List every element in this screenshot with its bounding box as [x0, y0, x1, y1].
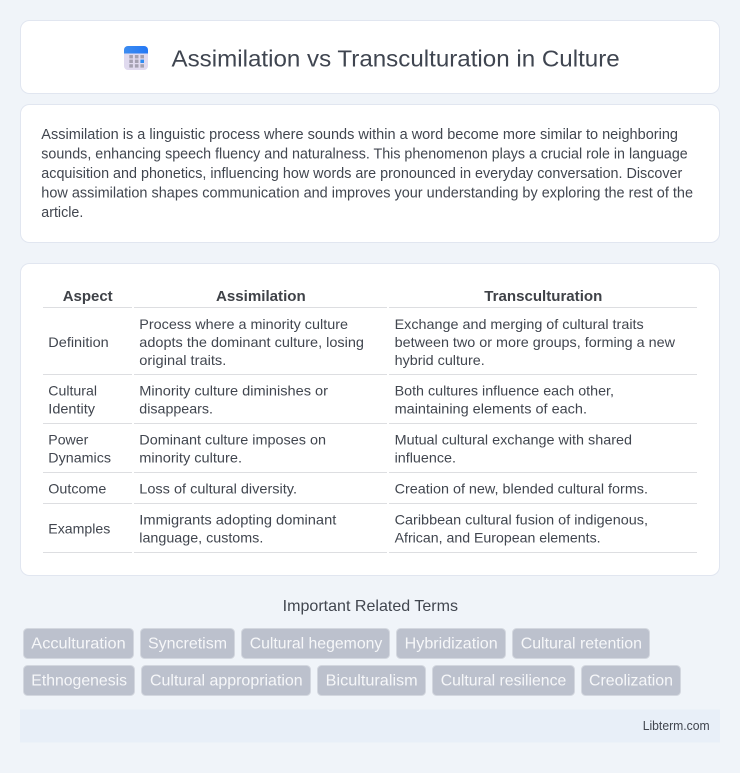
chip: creolization: Creolization — [589, 673, 673, 690]
row: definition: adopts the dominant culture, losing — [139, 334, 364, 350]
table header row: Assimilation — [216, 288, 306, 305]
heading: important related terms: Important Related Terms — [283, 598, 458, 615]
chip: cultural resilience — [432, 666, 574, 696]
row: examples — [43, 512, 697, 553]
row: cultural identity: Cultural — [48, 382, 97, 398]
row: cultural identity: Identity — [48, 400, 95, 416]
table header row: Aspect — [63, 288, 113, 305]
row: cultural identity: Both cultures influence each other, — [395, 382, 614, 398]
row: cultural identity: maintaining elements of each. — [395, 400, 587, 416]
row: definition: Exchange and merging of cultural traits — [395, 316, 644, 332]
intro paragraph: acquisition and phonetics, influencing how words are pronounced in everyday conversation. Discover — [41, 166, 682, 182]
row: definition: original traits. — [139, 352, 226, 368]
intro paragraph: article. — [41, 205, 83, 221]
chip: cultural resilience: Cultural resilience — [441, 673, 566, 690]
chip: hybridization: Hybridization — [405, 636, 498, 653]
row: cultural identity — [43, 382, 697, 424]
row: power dynamics: minority culture. — [139, 450, 242, 466]
footer credit: Libterm.com — [643, 719, 710, 733]
chip: syncretism — [140, 628, 234, 658]
row: power dynamics: Dynamics — [48, 450, 111, 466]
chip: cultural retention: Cultural retention — [521, 636, 642, 653]
row: definition — [43, 316, 697, 375]
row: definition: between two or more groups, forming a new — [395, 334, 676, 350]
row: power dynamics: Dominant culture imposes on — [139, 432, 326, 448]
row: outcome: Creation of new, blended cultural forms. — [395, 480, 648, 496]
panel: comparison table — [20, 264, 720, 576]
row: examples: Immigrants adopting dominant — [139, 512, 336, 528]
header panel — [20, 20, 720, 94]
intro paragraph: Assimilation is a linguistic process where sounds within a word become more similar to neighboring — [41, 127, 678, 143]
table header row: Transculturation — [484, 288, 602, 305]
panel: introduction — [20, 104, 720, 242]
chip: creolization — [582, 666, 680, 696]
chip: syncretism: Syncretism — [148, 636, 227, 653]
row: examples: Caribbean cultural fusion of indigenous, — [395, 512, 648, 528]
chip: cultural hegemony: Cultural hegemony — [250, 636, 382, 653]
chip: ethnogenesis — [24, 666, 134, 696]
chip: cultural appropriation: Cultural appropriation — [150, 673, 303, 690]
row: definition: Definition — [48, 334, 109, 350]
chip: biculturalism: Biculturalism — [326, 673, 418, 690]
footer bar — [20, 710, 720, 742]
chip: acculturation: Acculturation — [31, 636, 126, 653]
intro paragraph: how assimilation shapes communication and improves your understanding by exploring the rest of the — [41, 185, 693, 201]
icon: calendar — [124, 46, 148, 70]
chip: hybridization — [396, 628, 506, 658]
row: examples: African, and European elements. — [395, 530, 601, 546]
chip: cultural appropriation — [142, 666, 310, 696]
row: definition: hybrid culture. — [395, 352, 485, 368]
row: power dynamics: Power — [48, 432, 89, 448]
row: examples: Examples — [48, 520, 110, 536]
row: outcome — [43, 480, 697, 504]
row: cultural identity: disappears. — [139, 400, 213, 416]
row: outcome: Loss of cultural diversity. — [139, 480, 297, 496]
chip: cultural retention — [512, 628, 650, 658]
row: definition: Process where a minority culture — [139, 316, 348, 332]
row: cultural identity: Minority culture diminishes or — [139, 382, 328, 398]
row: outcome: Outcome — [48, 480, 107, 496]
row: examples: language, customs. — [139, 530, 263, 546]
chip: ethnogenesis: Ethnogenesis — [31, 673, 127, 690]
intro paragraph — [41, 127, 693, 221]
title: Assimilation vs Transculturation in Culture — [172, 46, 620, 72]
related term chips — [24, 628, 680, 696]
intro paragraph: sounds, enhancing speech fluency and naturalness. This phenomenon plays a crucial role in language — [41, 146, 688, 162]
chip: acculturation — [24, 628, 134, 658]
chip: cultural hegemony — [242, 628, 390, 658]
row: power dynamics: Mutual cultural exchange with shared — [395, 432, 632, 448]
row: power dynamics: influence. — [395, 450, 456, 466]
chip: biculturalism — [318, 666, 426, 696]
table header row — [43, 288, 697, 308]
row: power dynamics — [43, 432, 697, 473]
